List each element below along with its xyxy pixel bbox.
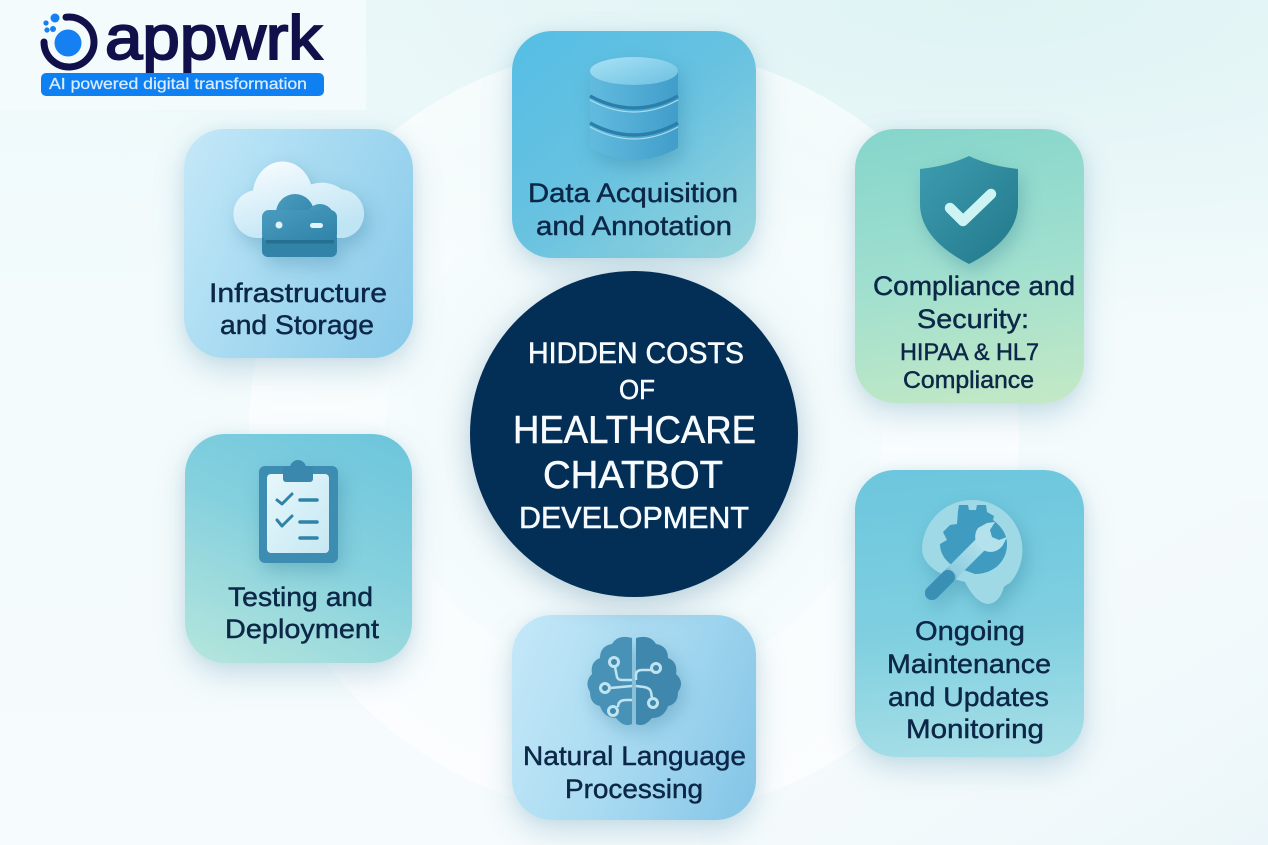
- center title: DEVELOPMENT: [519, 500, 749, 535]
- logo wordmark: appwrk: [105, 4, 323, 73]
- center title: HIDDEN COSTS: [528, 337, 744, 370]
- label: and Annotation: [536, 211, 732, 241]
- icon: gear wrench: [922, 500, 1031, 614]
- label: [209, 278, 387, 340]
- icon: cloud server: [231, 162, 374, 272]
- label: Compliance and: [873, 271, 1075, 301]
- icon: database: [589, 57, 687, 172]
- center title: [513, 337, 756, 535]
- panel: infrastructure: [184, 129, 413, 358]
- label: Security:: [917, 304, 1029, 334]
- panel: data acquisition: [512, 31, 756, 258]
- label: Compliance: [903, 367, 1034, 394]
- panel: testing: [185, 434, 412, 663]
- label: and Updates: [888, 682, 1049, 712]
- label: Natural Language: [523, 741, 746, 771]
- icon: brain: [586, 636, 690, 738]
- center title: HEALTHCARE: [513, 409, 756, 452]
- panel: maintenance: [855, 470, 1084, 757]
- panel: compliance: [855, 129, 1084, 403]
- logo mark: [40, 14, 98, 70]
- center title: OF: [619, 374, 655, 405]
- label: [873, 271, 1075, 394]
- logo tagline: AI powered digital transformation: [49, 76, 307, 93]
- label: Monitoring: [906, 714, 1044, 744]
- center title: CHATBOT: [543, 454, 723, 497]
- logo tagline: [41, 73, 324, 96]
- icon: clipboard: [257, 460, 347, 578]
- label: Deployment: [225, 614, 380, 644]
- panel: nlp: [512, 615, 756, 820]
- label: Ongoing: [915, 616, 1025, 646]
- label: [225, 582, 380, 644]
- label: Processing: [565, 774, 703, 804]
- label: Data Acquisition: [528, 178, 738, 208]
- label: [528, 178, 738, 241]
- logo: [0, 0, 366, 110]
- label: [523, 741, 746, 804]
- label: Testing and: [228, 582, 373, 612]
- icon: shield: [918, 156, 1028, 276]
- label: HIPAA & HL7: [900, 339, 1039, 366]
- label: Maintenance: [887, 649, 1051, 679]
- label: and Storage: [220, 310, 374, 340]
- center circle: [470, 271, 798, 597]
- label: [887, 616, 1051, 744]
- label: Infrastructure: [209, 278, 387, 308]
